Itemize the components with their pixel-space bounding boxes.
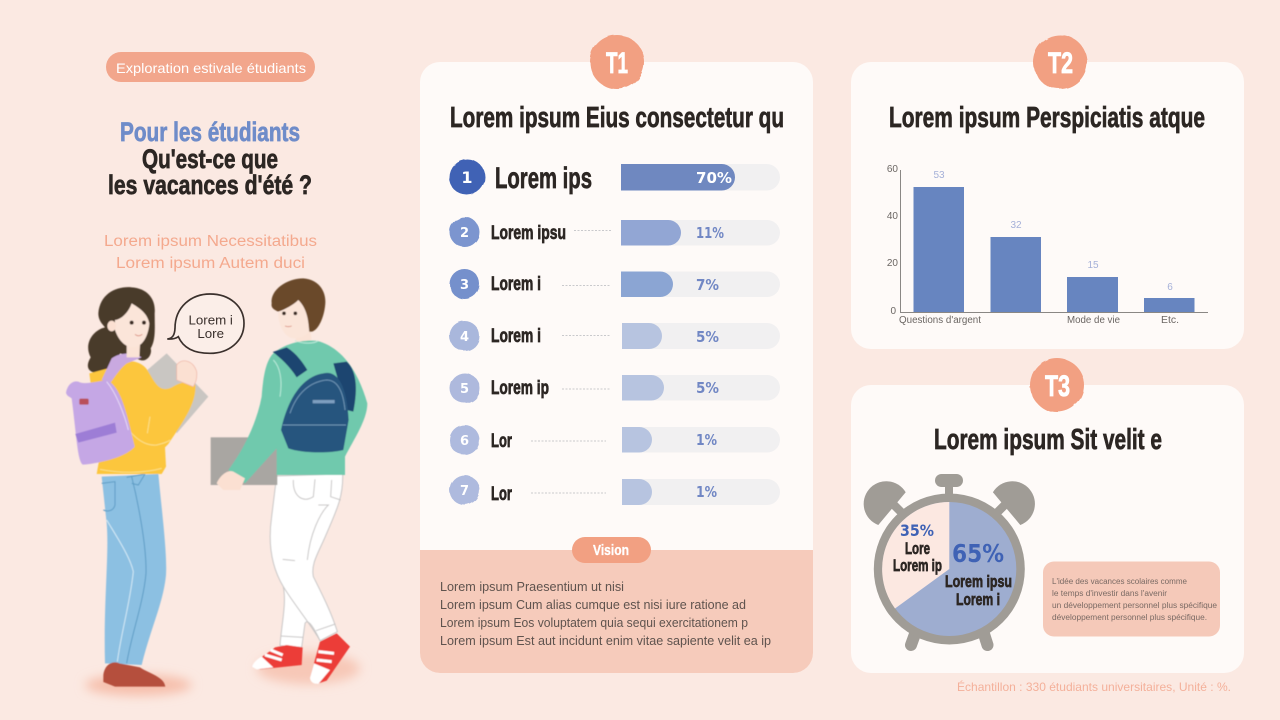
bar chart: Etc. (1161, 315, 1179, 326)
vision block: Vision (593, 543, 629, 559)
clock body (864, 474, 1035, 645)
bar chart: Questions d'argent (899, 315, 981, 326)
shadow under girl (85, 674, 192, 696)
row 7: 1% (696, 483, 717, 501)
row 6: 6 (460, 434, 469, 449)
badge: T3 (1030, 358, 1084, 412)
badge: T1: T1 (606, 47, 628, 80)
boy's hand (217, 471, 245, 490)
vision block (420, 537, 813, 673)
boy's hair (272, 278, 325, 332)
left column: intro (104, 52, 317, 272)
row 6 (450, 425, 780, 455)
bar chart: 6 (1167, 282, 1173, 293)
tablet held by girl (147, 353, 208, 433)
panel: T3 clock chart (851, 358, 1244, 673)
girl's strap (102, 354, 142, 383)
vision block: Lorem ipsum Est aut incidunt enim vitae sapiente velit ea ip (440, 633, 771, 648)
vision block: Lorem ipsum Eos voluptatem quia sequi exercitationem p (440, 615, 748, 630)
bar chart: Mode de vie (1067, 315, 1120, 326)
main heading (108, 117, 312, 200)
badge: T2 (1033, 35, 1087, 89)
label: 35% (893, 521, 942, 575)
row 5: 5% (696, 379, 719, 397)
main heading: Pour les étudiants (120, 117, 300, 147)
girl's backpack (66, 380, 135, 465)
bar chart (887, 164, 1208, 326)
row 3: Lorem i (491, 274, 541, 295)
boy (211, 278, 367, 684)
clock pie chart (864, 474, 1035, 645)
row 6: Lor (491, 431, 512, 452)
label: 65% (945, 539, 1012, 609)
vision block: Lorem ipsum Praesentium ut nisi (440, 579, 624, 594)
row 7: 7 (460, 484, 469, 499)
badge: T2: T2 (1048, 47, 1073, 80)
panel: T1 ranking (420, 35, 813, 673)
subheading: Lorem ipsum Necessitatibus (104, 233, 317, 250)
pie slice: 65% (882, 502, 1016, 636)
bar chart: 20 (887, 258, 898, 269)
bar chart: 40 (887, 211, 898, 222)
row 4: 4 (460, 330, 469, 345)
row 1: Lorem ips (495, 162, 592, 195)
row 1: 1 (461, 168, 473, 187)
label: 35%: Lorem ip (893, 556, 942, 575)
badge: T3: T3 (1045, 370, 1070, 403)
girl (66, 287, 208, 687)
row 3: 3 (460, 278, 469, 293)
row 2: 2 (460, 226, 469, 241)
subheading: Lorem ipsum Autem duci (116, 255, 305, 272)
speech bubble: Lore (197, 326, 224, 341)
row 2 (450, 217, 780, 247)
bar chart: 60 (887, 164, 898, 175)
heading: T1: Lorem ipsum Eius consectetur qu (450, 102, 784, 134)
footnote: Échantillon : 330 étudiants universitaires, Unité : %. (957, 679, 1231, 694)
main heading: les vacances d'été ? (108, 170, 312, 200)
girl's sweater (89, 361, 195, 474)
row 5 (450, 373, 780, 403)
row 2: Lorem ipsu (491, 223, 566, 244)
girl's jeans (102, 474, 166, 665)
row 3 (450, 269, 780, 299)
note box (1043, 562, 1220, 636)
main heading: Qu'est-ce que (142, 144, 278, 174)
boy's pants (270, 474, 343, 647)
row 1 (449, 159, 780, 195)
pie slice: 35% (882, 502, 949, 608)
girl's hair (88, 287, 155, 373)
bar chart: 32 (1010, 220, 1022, 231)
badge: T1 (590, 35, 644, 89)
label: 35%: 35% (900, 521, 934, 540)
row 7 (450, 475, 780, 505)
label: 65%: Lorem i (956, 590, 1000, 609)
note box: un développement personnel plus spécifique (1052, 601, 1218, 610)
speech bubble (167, 294, 244, 353)
girl's hand (177, 361, 197, 387)
label: 65%: Lorem ipsu (945, 572, 1012, 591)
tag pill (106, 52, 315, 82)
tag pill: Exploration estivale étudiants (116, 60, 306, 76)
speech bubble: Lorem i (188, 312, 233, 327)
girl's shoes (103, 662, 165, 687)
row 5: Lorem ip (491, 378, 549, 399)
label: 65%: 65% (952, 539, 1004, 568)
boy's backpack straps (273, 347, 356, 412)
vision block: Lorem ipsum Cum alias cumque est nisi iure ratione ad (440, 597, 746, 612)
boy's right shoe (310, 633, 350, 684)
bar chart: 15 (1087, 260, 1099, 271)
label: 35%: Lore (905, 539, 930, 558)
panel: T2 bar chart (851, 35, 1244, 349)
boy's face (293, 327, 312, 342)
heading: T3: Lorem ipsum Sit velit e (934, 424, 1162, 456)
bar chart: 0 (890, 306, 896, 317)
illustration: two students (66, 278, 367, 696)
note box: le temps d'investir dans l'avenir (1052, 589, 1167, 598)
row 1: 70% (696, 169, 732, 187)
row 3: 7% (696, 276, 719, 294)
row 4 (450, 321, 780, 351)
row 7: Lor (491, 484, 512, 505)
girl's face (127, 345, 140, 357)
boy's backpack (281, 373, 349, 452)
shadow under boy (257, 652, 360, 684)
note box: L'idée des vacances scolaires comme (1052, 577, 1188, 586)
row 2: 11% (696, 224, 724, 242)
row 6: 1% (696, 431, 717, 449)
boy's sweater (228, 340, 367, 483)
boy's tablet (211, 437, 277, 485)
row 4: Lorem i (491, 326, 541, 347)
bar chart: 53 (933, 170, 945, 181)
subheading (104, 233, 317, 272)
row 4: 5% (696, 328, 719, 346)
row 5: 5 (460, 382, 469, 397)
boy's left shoe (252, 645, 303, 669)
note box: développement personnel plus spécifique. (1052, 613, 1207, 622)
